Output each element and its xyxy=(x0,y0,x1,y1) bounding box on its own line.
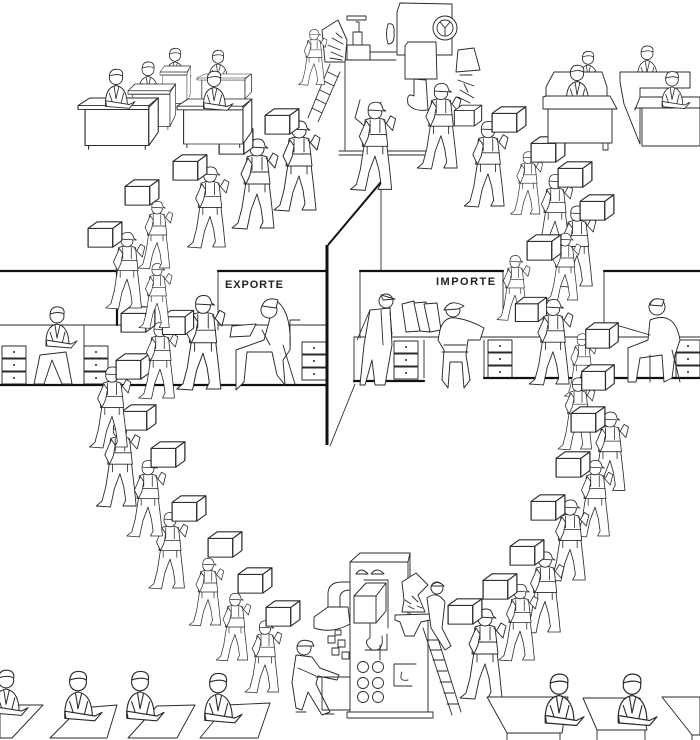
worker 7 xyxy=(90,354,150,448)
worker 2 xyxy=(216,568,272,661)
counter xyxy=(354,337,700,382)
wall outline xyxy=(360,155,604,338)
desk 4 xyxy=(200,703,270,738)
worker 1 xyxy=(245,601,300,693)
bottom machine xyxy=(292,553,461,718)
worker 14 xyxy=(219,129,278,229)
worker 15 xyxy=(265,109,320,211)
central box xyxy=(354,580,388,628)
bottom-right desks xyxy=(487,674,700,740)
work table xyxy=(316,677,350,710)
side wheel xyxy=(386,24,394,44)
ladder xyxy=(423,626,461,715)
top machine xyxy=(322,3,480,155)
worker 5 xyxy=(527,233,581,301)
panel: import office xyxy=(354,155,700,388)
top-right desks xyxy=(543,46,700,150)
worker 10 xyxy=(571,407,628,491)
worker 5 xyxy=(127,442,185,537)
desk 3 xyxy=(662,697,700,735)
left desk group xyxy=(543,51,617,150)
worker 4 xyxy=(554,195,614,287)
right file of workers carrying boxes xyxy=(448,107,628,699)
machine body xyxy=(339,45,431,155)
gauges xyxy=(356,570,384,574)
worker 13 xyxy=(173,155,229,248)
worker 12 xyxy=(531,495,589,581)
left front desk xyxy=(78,69,158,149)
worker 6 xyxy=(96,405,156,507)
folders on desk xyxy=(402,301,441,332)
left file of workers carrying boxes xyxy=(88,109,320,693)
counter and drawers xyxy=(2,325,326,384)
middle row desks and people xyxy=(128,62,176,130)
worker 3 xyxy=(189,532,242,626)
person 4 xyxy=(205,673,242,723)
worker 3 xyxy=(534,162,592,251)
worker on top ladder xyxy=(298,29,327,85)
dial xyxy=(433,16,457,40)
tower xyxy=(350,553,428,712)
exhaust hood xyxy=(314,582,350,630)
bottom-left desks xyxy=(0,670,270,738)
worker 2 xyxy=(510,137,565,215)
seated clerk left xyxy=(34,307,77,384)
heading: EXPORTE: EXPORTE xyxy=(225,279,284,291)
pipes xyxy=(365,624,416,686)
top-left desks xyxy=(78,48,252,149)
worker 6 xyxy=(497,256,547,322)
operator at table xyxy=(292,640,339,715)
drawers xyxy=(394,340,700,379)
desk 2 xyxy=(583,698,647,730)
worker 11 xyxy=(88,222,145,309)
person 3 xyxy=(127,671,164,721)
desk 1 xyxy=(0,705,43,738)
six round gauges xyxy=(358,662,384,702)
desk 2 xyxy=(50,705,117,738)
tower details xyxy=(347,553,433,718)
worker 9 xyxy=(558,365,614,450)
export wall panel xyxy=(0,271,327,330)
right front desk xyxy=(177,71,252,148)
inner block and hook pipe xyxy=(405,42,437,110)
upper block xyxy=(397,3,452,55)
hopper with pieces xyxy=(456,48,480,103)
back wall left xyxy=(0,271,327,325)
seated right clerk xyxy=(616,299,680,382)
worker on ladder xyxy=(427,582,451,650)
panel: export office xyxy=(0,271,327,390)
output hopper xyxy=(395,573,430,636)
desk legs xyxy=(507,730,692,740)
left hopper and pieces xyxy=(322,20,347,62)
import wall panel xyxy=(360,270,700,272)
desk 1 xyxy=(487,697,568,733)
worker 10 xyxy=(139,264,172,328)
worker 8 xyxy=(121,307,178,399)
floor line import xyxy=(354,378,700,381)
person 2 xyxy=(618,674,657,726)
seated export clerk xyxy=(230,299,300,390)
worker 9 xyxy=(162,296,225,390)
central partition xyxy=(327,182,381,446)
worker lifting arms xyxy=(350,100,396,190)
desk 3 xyxy=(128,705,195,738)
worker 11 xyxy=(556,452,613,537)
worker 14 xyxy=(483,574,538,661)
right desk group xyxy=(620,46,700,146)
floor line export xyxy=(0,384,327,386)
standing import clerk xyxy=(357,294,395,385)
person 1 xyxy=(545,674,584,726)
back row desks and people xyxy=(160,48,251,106)
person 1 xyxy=(0,670,28,715)
worker filling box at hopper xyxy=(417,83,482,169)
valve xyxy=(347,16,370,60)
worker 4 xyxy=(149,496,206,589)
worker 15 xyxy=(448,599,506,699)
worker 13 xyxy=(510,540,564,633)
worker 12 xyxy=(125,180,173,269)
person 2 xyxy=(65,671,102,721)
worker 1 xyxy=(464,107,526,207)
import clerk on stool xyxy=(438,303,484,388)
heading: IMPORTE: IMPORTE xyxy=(436,276,497,288)
worker 8 xyxy=(564,323,618,397)
falling pieces xyxy=(328,630,349,659)
worker 7 xyxy=(529,299,573,385)
ladder top xyxy=(308,64,340,122)
